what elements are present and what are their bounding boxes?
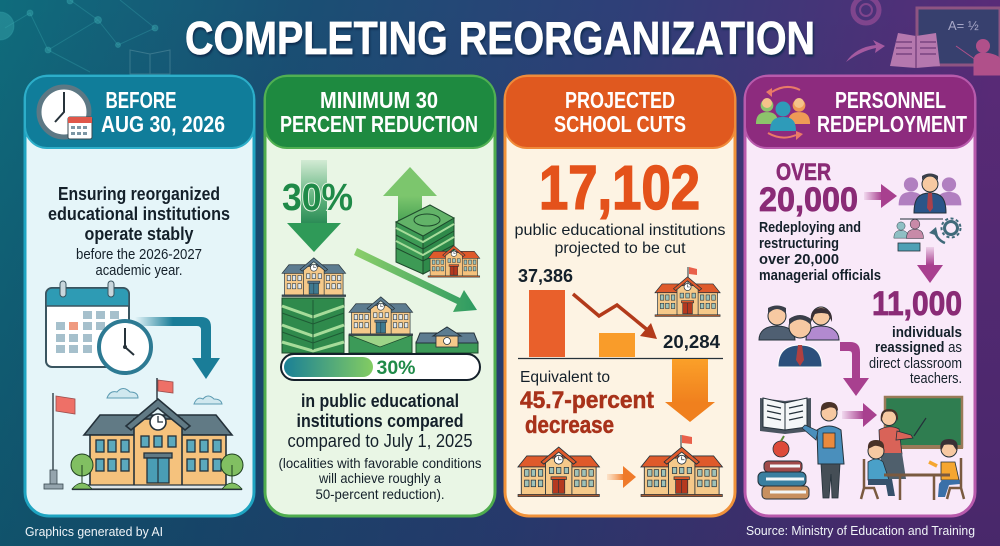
text block: operate stably	[84, 224, 194, 244]
panel header: PROJECTED	[565, 87, 675, 113]
decorative chalkboard top-right	[846, 8, 1000, 75]
heading	[101, 87, 225, 137]
arrow: orange right	[607, 466, 636, 488]
arrow: right	[864, 184, 897, 208]
icon: school after	[641, 435, 722, 497]
arrow: down	[917, 247, 943, 283]
text block: will achieve roughly a	[318, 470, 441, 486]
stat: 30%: 30%	[282, 177, 353, 219]
panel: projected school cuts	[505, 76, 735, 516]
heading: BEFORE	[106, 87, 176, 113]
stat: 45.7-percent decrease: decrease	[525, 412, 614, 439]
text block: 50-percent reduction).	[316, 486, 444, 502]
text block: teachers.	[910, 371, 962, 387]
icon: three officials	[759, 306, 839, 367]
icon: open book	[760, 398, 811, 434]
stat: 45.7-percent decrease	[520, 387, 654, 439]
progress bar	[281, 354, 480, 380]
icon: calendar	[46, 281, 129, 367]
panel header	[25, 76, 254, 148]
stat: 45.7-percent decrease: 45.7-percent	[520, 387, 654, 414]
icon: clouds	[107, 388, 222, 404]
arrow: calendar to school	[135, 317, 220, 379]
icon: chalkboard	[885, 397, 963, 449]
text: equivalent to: Equivalent to	[520, 369, 610, 386]
icon: structure and gear	[894, 218, 960, 251]
text block	[278, 391, 482, 502]
panel header: MINIMUM 30	[320, 87, 438, 113]
bar chart: 20,284	[663, 332, 720, 352]
icon: people rotating	[756, 87, 810, 140]
text block: direct classroom	[869, 356, 962, 372]
bar chart	[518, 266, 723, 358]
stat: over 20,000	[759, 159, 858, 219]
panel header: PERCENT REDUCTION	[280, 111, 478, 137]
heading	[817, 87, 967, 137]
text block	[869, 325, 962, 387]
title: COMPLETING REORGANIZATION	[185, 12, 815, 64]
heading: AUG 30, 2026	[101, 111, 225, 137]
panel: personnel redeployment	[745, 76, 975, 516]
arrow: zigzag decline	[573, 294, 657, 339]
text block: institutions compared	[296, 411, 464, 431]
panel: minimum 30 percent reduction	[265, 76, 495, 516]
icon: school	[71, 378, 243, 490]
text block: academic year.	[96, 263, 182, 279]
icon: managers	[899, 174, 961, 213]
text block: restructuring	[759, 236, 839, 252]
stat: 11,000: 11,000	[872, 285, 962, 323]
text block: individuals	[892, 325, 962, 341]
text block: Redeploying and	[759, 220, 861, 236]
icon: flagpole	[44, 393, 75, 489]
text block	[514, 222, 726, 257]
text block: public educational institutions	[514, 222, 726, 239]
progress bar: 30%	[376, 358, 416, 379]
arrow: down	[287, 160, 341, 252]
text block: in public educational	[301, 391, 459, 411]
panel: before Aug 30, 2026	[25, 76, 254, 516]
icon: teacher man	[802, 402, 844, 498]
panel header	[505, 76, 735, 148]
stat: over 20,000: 20,000	[759, 181, 858, 219]
icon: school	[655, 267, 720, 316]
arrow: down orange	[665, 359, 715, 422]
text block: educational institutions	[48, 204, 230, 224]
panel header	[745, 76, 975, 148]
arrow: diagonal decline	[354, 248, 477, 312]
text block: projected to be cut	[554, 240, 686, 257]
text block: over 20,000	[759, 252, 839, 268]
panel header: SCHOOL CUTS	[554, 111, 686, 137]
icon: school before	[518, 447, 599, 497]
arrow: curved down	[840, 342, 869, 396]
icon: books and apple	[758, 436, 809, 499]
icon: clock and calendar	[39, 87, 92, 139]
icon: clock	[99, 321, 151, 373]
decorative network top-left	[0, 0, 158, 72]
decorative book top-left	[130, 50, 170, 74]
text block: managerial officials	[759, 268, 881, 284]
icon: teacher woman	[879, 409, 913, 479]
chart: shrinking school stacks	[282, 258, 478, 353]
arrow: to classroom	[842, 403, 877, 427]
stat: over 20,000: OVER	[776, 159, 831, 186]
text block: Ensuring reorganized	[58, 184, 220, 204]
text block: before the 2026-2027	[76, 247, 202, 263]
footer credit: Graphics generated by AI	[25, 525, 163, 539]
panel header	[265, 76, 495, 148]
decorative chalkboard top-right: A= ½	[948, 18, 979, 33]
icon: money stack	[396, 205, 454, 274]
text block	[759, 220, 881, 284]
text block: (localities with favorable conditions	[278, 455, 482, 471]
icon: small school	[428, 246, 480, 277]
footer source: Source: Ministry of Education and Training	[746, 524, 975, 538]
bar chart: 37,386	[518, 266, 573, 286]
text block	[48, 184, 230, 279]
icon: table and students	[861, 439, 964, 500]
heading: PERSONNEL	[835, 87, 946, 113]
decorative gear top-right	[853, 0, 879, 23]
arrow: up	[383, 167, 437, 228]
text block: reassigned as	[875, 340, 962, 356]
stat: 17,102: 17,102	[539, 154, 700, 223]
text block: compared to July 1, 2025	[288, 431, 472, 451]
